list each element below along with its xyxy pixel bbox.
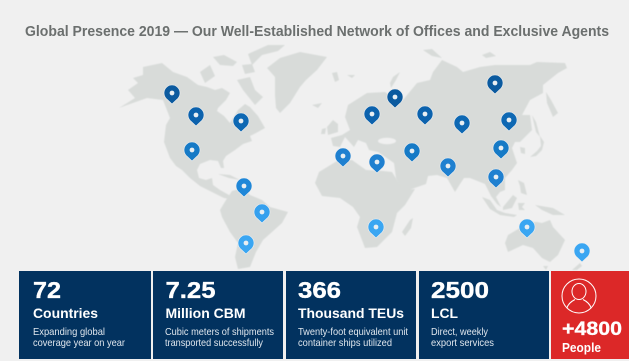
panel: LCL: Direct, weekly: [431, 327, 489, 338]
South America: [220, 188, 288, 269]
New Guinea: [535, 205, 565, 215]
pin: New Zealand: [574, 243, 590, 262]
pin: Kazakhstan: [454, 115, 470, 134]
panel: thousand TEUs: [286, 271, 416, 359]
Kamchatka and Sakhalin: [532, 92, 558, 137]
panel: thousand TEUs: container ships utilized: [298, 338, 392, 349]
panel: million CBM: transported successfully: [165, 338, 264, 349]
pin: Middle East: [404, 143, 420, 162]
pin: Australia: [519, 219, 535, 238]
world map: [119, 45, 582, 270]
panel: million CBM: 7.25: [166, 277, 216, 303]
pin: Southeast Asia: [488, 169, 504, 188]
panel: million CBM: [153, 271, 283, 359]
pin: Colombia: [236, 178, 252, 197]
panel: LCL: 2500: [431, 277, 489, 303]
panel: million CBM: Cubic meters of shipments: [165, 327, 274, 338]
pin: Libya: [369, 154, 385, 173]
icon: person in circle: [562, 279, 596, 313]
Southeast Asia islands: [482, 180, 527, 217]
panel: people: +4800: [562, 319, 622, 340]
Australia: [505, 220, 565, 262]
pin: Argentina: [238, 235, 254, 254]
panel: people: People: [562, 341, 601, 355]
British Isles: [321, 120, 338, 135]
panel: million CBM: Million CBM: [166, 305, 246, 321]
pin: Brazil: [254, 204, 270, 223]
panel: countries: Countries: [33, 305, 98, 321]
panel: people: [551, 271, 629, 359]
pin: Mongolia: [501, 112, 517, 131]
Korea and Japan: [520, 136, 544, 157]
pin: North Africa: [335, 148, 351, 167]
panel: countries: coverage year on year: [33, 338, 126, 349]
Tasmania and New Zealand: [543, 263, 582, 270]
panel: thousand TEUs: Thousand TEUs: [298, 305, 404, 321]
pin: India: [440, 158, 456, 177]
panel: thousand TEUs: 366: [298, 277, 341, 303]
Svalbard and Arctic islands: [332, 49, 496, 88]
Black Sea: [378, 138, 396, 144]
pin: South Africa: [368, 219, 384, 238]
title: Global Presence 2019 — Our Well-Established Network of Offices and Exclusive Agents: [25, 24, 609, 40]
panel: countries: [19, 271, 151, 359]
pin: eastern Canada: [233, 113, 249, 132]
pin: China: [493, 140, 509, 159]
pin: Alaska Canada: [164, 85, 180, 104]
pin: Siberia: [487, 75, 503, 94]
pin: western Canada: [188, 107, 204, 126]
Central America and Caribbean: [218, 174, 240, 180]
Iceland: [312, 103, 322, 108]
panel: thousand TEUs: Twenty-foot equivalent unit: [298, 327, 408, 338]
pin: United States: [184, 142, 200, 161]
pin: northern Russia: [387, 89, 403, 108]
panel: LCL: export services: [431, 338, 494, 349]
Greenland: [267, 52, 327, 113]
panel: LCL: LCL: [431, 305, 458, 321]
Eurasia: [331, 60, 567, 207]
panel: countries: Expanding global: [33, 327, 105, 338]
Africa: [315, 160, 415, 248]
panel: LCL: [419, 271, 549, 359]
Madagascar: [402, 218, 413, 236]
North America: [119, 63, 265, 199]
Canadian Arctic islands: [200, 45, 285, 105]
pin: eastern Europe: [364, 106, 380, 125]
pin: central Russia: [417, 106, 433, 125]
panel: countries: 72: [33, 277, 61, 303]
